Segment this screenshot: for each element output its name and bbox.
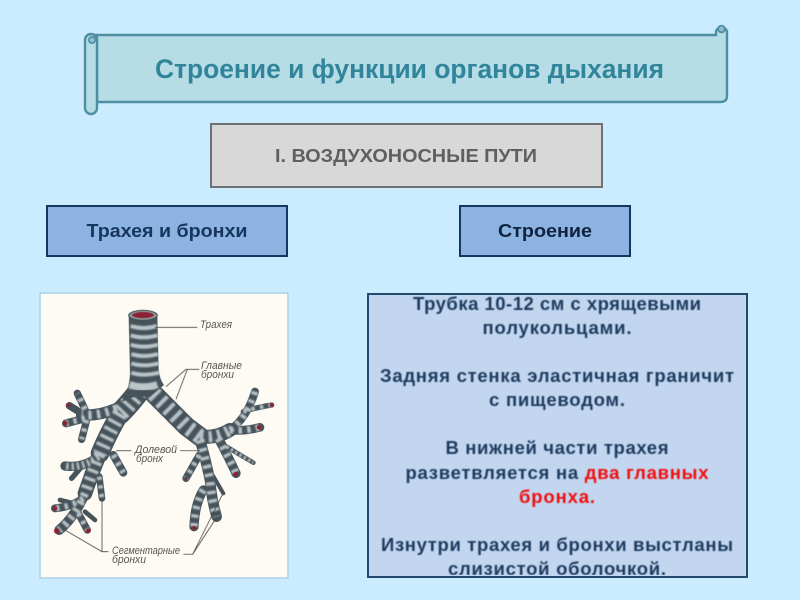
dark bronchi base xyxy=(55,390,272,530)
description text xyxy=(380,293,734,579)
section box: air passages xyxy=(211,124,602,187)
scroll left curl xyxy=(89,37,95,43)
illustration captions: Трахея xyxy=(200,319,232,331)
illustration captions: бронхи xyxy=(201,369,234,381)
illustration captions: бронх xyxy=(136,453,163,465)
description text: В нижней части трахея xyxy=(446,437,668,458)
description text: Задняя стенка эластичная граничит xyxy=(380,365,734,386)
description text: с пищеводом. xyxy=(489,389,625,410)
trachea tube xyxy=(122,310,164,402)
label box: structure xyxy=(460,206,630,256)
description text: слизистой оболочкой. xyxy=(448,558,666,579)
section heading: I. ВОЗДУХОНОСНЫЕ ПУТИ xyxy=(275,146,537,166)
scroll left roll xyxy=(85,34,97,114)
description text: разветвляется на два главных xyxy=(406,462,709,483)
label box: trachea and bronchi xyxy=(47,206,287,256)
description text: Трубка 10-12 см с хрящевыми xyxy=(413,293,701,314)
label box: structure: Строение xyxy=(498,221,592,241)
description text: полукольцами. xyxy=(482,317,632,338)
description text: бронха. xyxy=(519,486,595,507)
text panel: structure description xyxy=(368,293,747,579)
illustration panel: trachea and bronchi xyxy=(40,293,288,578)
trachea opening xyxy=(129,310,157,320)
scroll right curl xyxy=(718,26,725,32)
light cartilage rings xyxy=(55,390,272,530)
bronchial tree drawing xyxy=(53,310,274,554)
illustration captions xyxy=(112,319,242,566)
scroll body xyxy=(92,27,727,102)
bronchus tips xyxy=(53,403,274,534)
illustration captions: бронхи xyxy=(112,554,146,566)
illustration captions: Главные xyxy=(201,360,242,372)
title text: Строение и функции органов дыхания xyxy=(155,54,664,84)
panel border xyxy=(368,294,747,577)
leader lines xyxy=(66,327,223,554)
label box: trachea and bronchi: Трахея и бронхи xyxy=(86,221,248,241)
description text: Изнутри трахея и бронхи выстланы xyxy=(381,534,733,555)
illustration captions: Долевой xyxy=(133,444,177,456)
illustration captions: Сегментарные xyxy=(112,545,180,557)
title scroll banner xyxy=(85,26,727,114)
